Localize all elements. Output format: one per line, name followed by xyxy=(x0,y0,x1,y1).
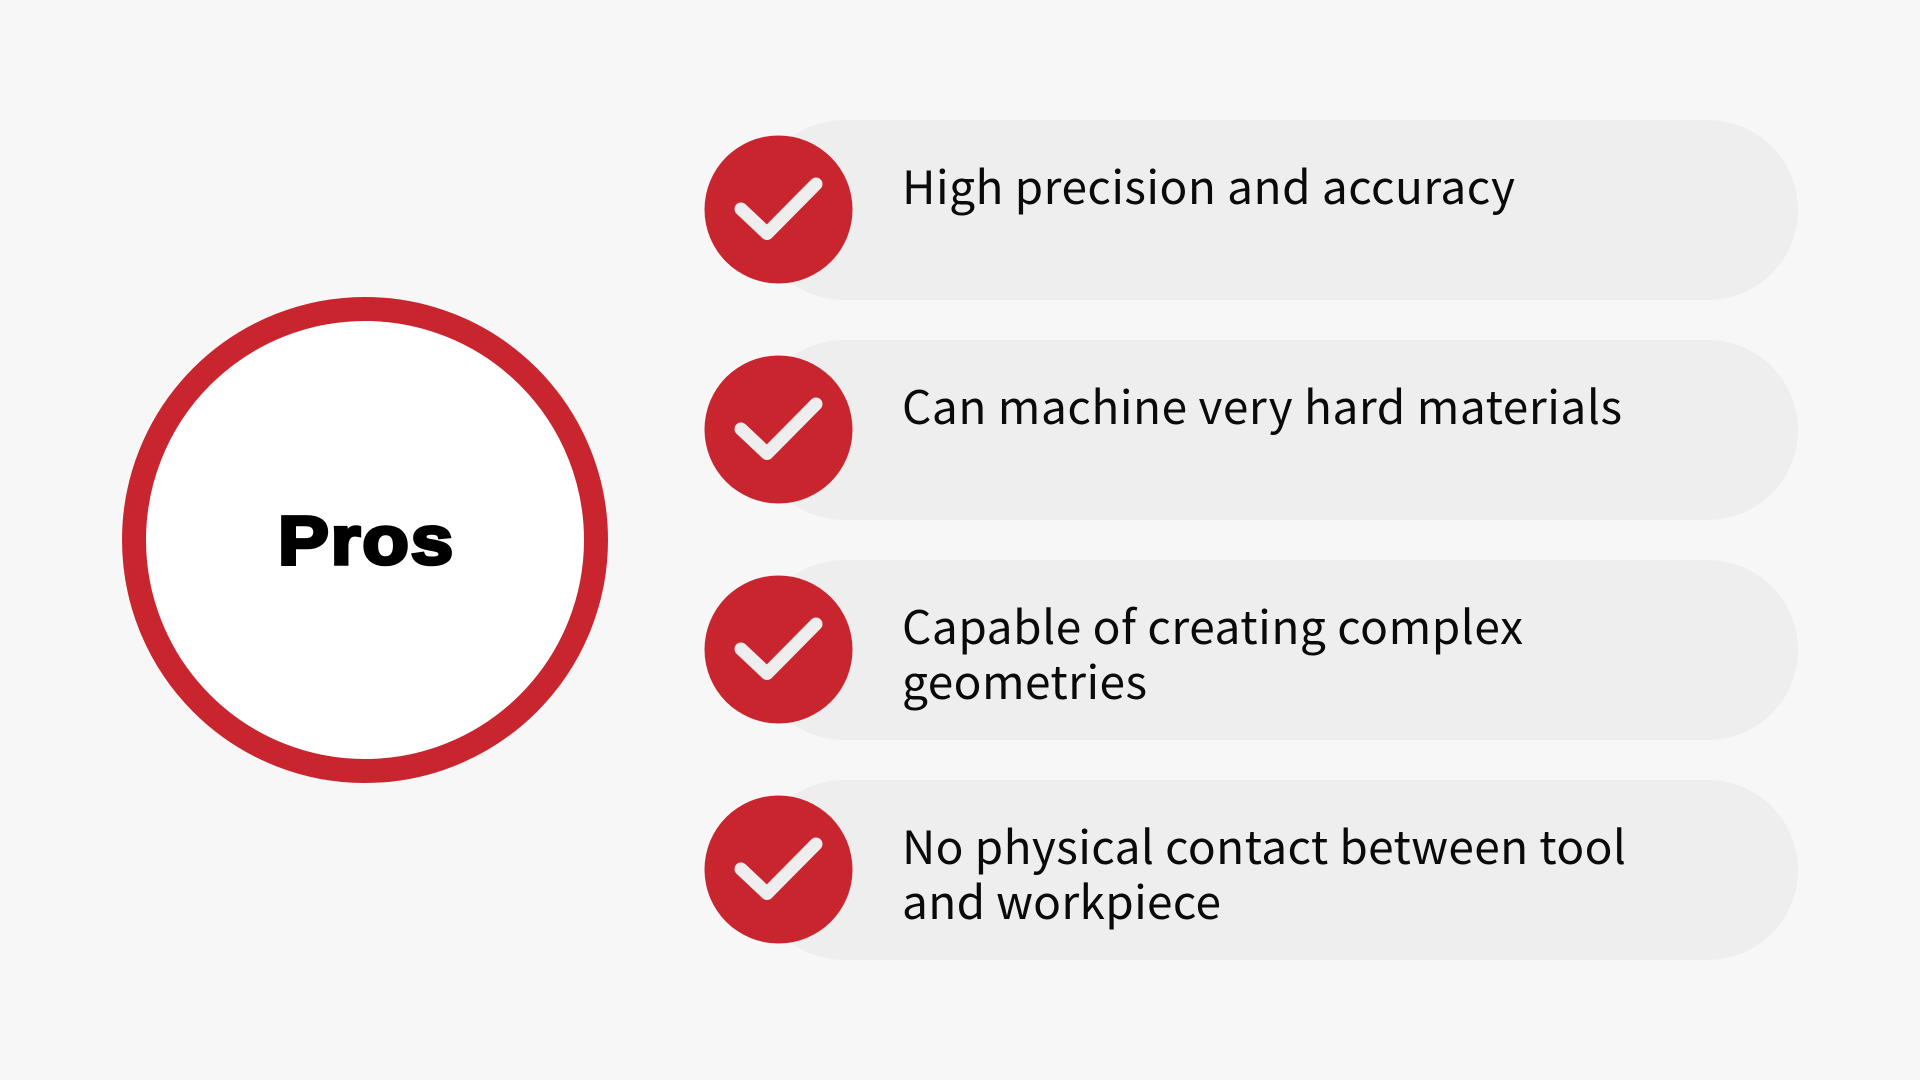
icon: check mark xyxy=(704,136,852,284)
text: no physical contact xyxy=(902,812,1626,933)
list item 2 xyxy=(704,340,1798,520)
pill background xyxy=(754,780,1798,960)
text: no physical contact: No physical contact between tool xyxy=(902,812,1626,878)
text: complex geometries xyxy=(902,592,1523,713)
text: complex geometries: geometries xyxy=(902,647,1147,713)
list item 4 xyxy=(704,780,1798,960)
icon: check mark xyxy=(704,796,852,944)
pill background xyxy=(754,340,1798,520)
text: complex geometries: Capable of creating complex xyxy=(902,592,1523,658)
text: no physical contact: and workpiece xyxy=(902,867,1221,933)
list item 3 xyxy=(704,560,1798,740)
panel: pros badge xyxy=(134,309,596,771)
badge ring xyxy=(134,309,596,771)
icon: check mark xyxy=(704,356,852,504)
pill background xyxy=(754,560,1798,740)
pill background xyxy=(754,120,1798,300)
heading: Pros: Pros xyxy=(278,502,455,579)
text: hard materials: Can machine very hard materials xyxy=(902,372,1622,438)
list item 1 xyxy=(704,120,1798,300)
text: high precision: High precision and accuracy xyxy=(902,152,1515,218)
icon: check mark xyxy=(704,576,852,724)
